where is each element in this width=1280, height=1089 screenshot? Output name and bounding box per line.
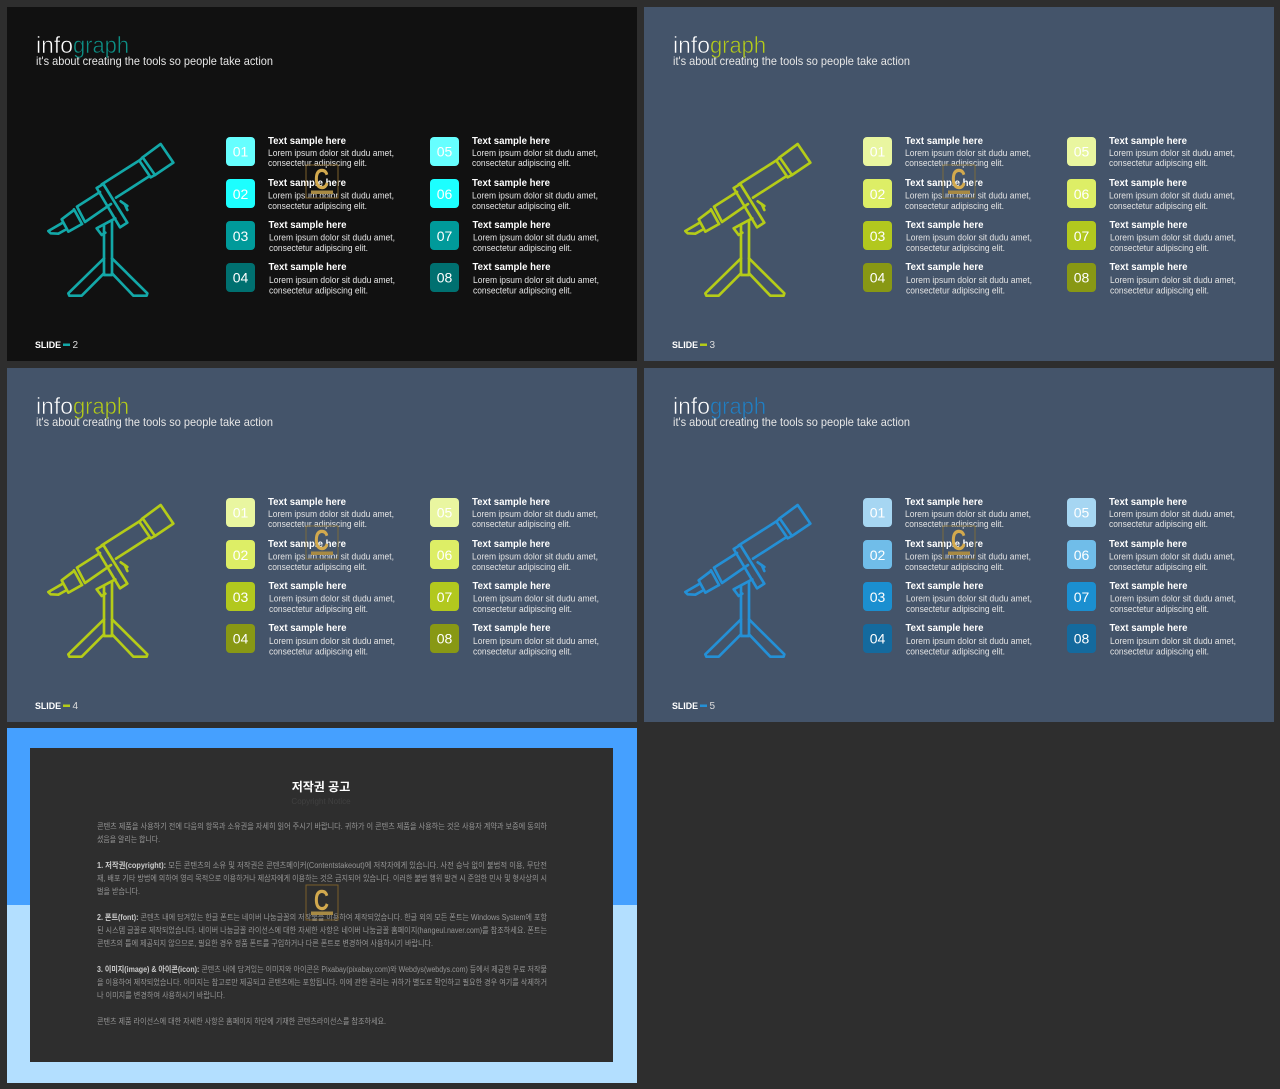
font paragraph: 된 시스템 글꼴로 제작되었습니다. 네이버 나눔글꼴 라이선스에 대한 자세한 사항은 네이버 나눔글꼴 홈페이지(hangeul.naver.com)를 참조하세요. 폰트는 xyxy=(97,925,547,935)
panel: slide 3 xyxy=(644,7,1274,361)
watermark logo: C xyxy=(314,164,329,196)
item 03: consectetur adipiscing elit. xyxy=(269,243,368,253)
item 03: 03 xyxy=(870,589,885,605)
item 01: Text sample here xyxy=(905,135,983,147)
item 03: Text sample here xyxy=(906,580,984,592)
item 07: 07 xyxy=(1074,228,1089,244)
item 03: Lorem ipsum dolor sit dudu amet, xyxy=(269,232,395,242)
item 04: consectetur adipiscing elit. xyxy=(906,646,1005,656)
slide number: SLIDE xyxy=(672,340,698,351)
item 06 xyxy=(1067,538,1235,572)
icon: telescope xyxy=(685,505,810,657)
item 03: Text sample here xyxy=(906,219,984,231)
item 05: 05 xyxy=(1074,504,1089,520)
item 02: Lorem ipsum dolor sit dudu amet, xyxy=(268,552,394,562)
item 07: consectetur adipiscing elit. xyxy=(1110,243,1209,253)
item 08: Lorem ipsum dolor sit dudu amet, xyxy=(1110,275,1236,285)
item 08 xyxy=(430,261,599,296)
item 07 xyxy=(1067,580,1236,614)
item 08: 08 xyxy=(437,270,452,286)
panel: copyright notice xyxy=(7,728,637,1083)
item 04: Lorem ipsum dolor sit dudu amet, xyxy=(906,275,1032,285)
item 01: 01 xyxy=(233,144,248,160)
item 04 xyxy=(863,261,1032,296)
item 04 xyxy=(863,622,1032,656)
item 03: 03 xyxy=(233,228,248,244)
item 07: 07 xyxy=(1074,589,1089,605)
item 05: Lorem ipsum dolor sit dudu amet, xyxy=(1109,509,1235,519)
item 06: Text sample here xyxy=(1109,177,1187,189)
item 04: consectetur adipiscing elit. xyxy=(906,286,1005,296)
item 07: Lorem ipsum dolor sit dudu amet, xyxy=(473,594,599,604)
item 04 xyxy=(226,261,395,296)
item 05 xyxy=(430,496,598,529)
watermark logo xyxy=(943,525,975,559)
slide number: 5 xyxy=(710,701,716,712)
item 08: Lorem ipsum dolor sit dudu amet, xyxy=(473,636,599,646)
item 03: Text sample here xyxy=(268,580,347,592)
slide number xyxy=(672,701,716,712)
item 06: Lorem ipsum dolor sit dudu amet, xyxy=(472,190,598,200)
item 03: Lorem ipsum dolor sit dudu amet, xyxy=(269,594,395,604)
heading xyxy=(36,32,129,58)
item 01: 01 xyxy=(870,144,885,160)
watermark logo: C xyxy=(951,164,966,196)
item 03 xyxy=(863,219,1032,253)
item 02: 02 xyxy=(233,186,248,202)
item 07: consectetur adipiscing elit. xyxy=(473,243,572,253)
item 02: Lorem ipsum dolor sit dudu amet, xyxy=(268,190,394,200)
item 05: Text sample here xyxy=(472,135,550,147)
item 08: 08 xyxy=(1074,630,1089,646)
copyright paragraph: 재, 배포 기타 방법에 의하여 영리 목적으로 이용하거나 제삼자에게 이용하는 것은 금지되어 있습니다. 이러한 불법 행위 발견 시 준엄한 민사 및 형사상의 시 xyxy=(97,873,547,883)
item 04: Lorem ipsum dolor sit dudu amet, xyxy=(269,275,395,285)
heading xyxy=(36,393,129,419)
intro paragraph xyxy=(97,821,548,844)
heading: info xyxy=(673,393,710,419)
item 06: Lorem ipsum dolor sit dudu amet, xyxy=(1109,190,1235,200)
item 04: 04 xyxy=(233,630,248,646)
item 01: consectetur adipiscing elit. xyxy=(268,158,367,168)
item 01: Lorem ipsum dolor sit dudu amet, xyxy=(268,148,394,158)
heading: graph xyxy=(73,393,129,419)
watermark logo xyxy=(306,525,338,559)
item 08 xyxy=(1067,261,1236,296)
item 04: Lorem ipsum dolor sit dudu amet, xyxy=(906,636,1032,646)
item 03: consectetur adipiscing elit. xyxy=(906,243,1005,253)
item 07 xyxy=(430,219,599,253)
item 01: consectetur adipiscing elit. xyxy=(905,158,1004,168)
item 02 xyxy=(226,538,394,572)
item 03: Lorem ipsum dolor sit dudu amet, xyxy=(906,232,1032,242)
item 06: Lorem ipsum dolor sit dudu amet, xyxy=(472,552,598,562)
heading: info xyxy=(36,393,73,419)
item 06: Text sample here xyxy=(472,538,550,550)
item 03 xyxy=(863,580,1032,614)
item 05 xyxy=(430,135,598,168)
item 05: Text sample here xyxy=(1109,135,1187,147)
item 01: Text sample here xyxy=(905,496,983,508)
notice title: 저작권 공고 xyxy=(292,779,350,794)
item 01: Lorem ipsum dolor sit dudu amet, xyxy=(268,509,394,519)
heading xyxy=(673,32,766,58)
image and icon paragraph: 을 이용하여 제작되었습니다. 이미지는 참고로만 제공되고 콘텐츠에는 포함됩니다. 이에 관한 권리는 귀하가 별도로 확인하고 필요한 경우 여기를 삭제하거 xyxy=(97,977,547,987)
item 02 xyxy=(226,177,394,211)
item 03: Lorem ipsum dolor sit dudu amet, xyxy=(906,594,1032,604)
item 04: Text sample here xyxy=(268,622,347,634)
heading: info xyxy=(673,32,710,58)
item 05: Lorem ipsum dolor sit dudu amet, xyxy=(1109,148,1235,158)
item 07: Text sample here xyxy=(1110,580,1188,592)
item 01: consectetur adipiscing elit. xyxy=(268,519,367,529)
item 08 xyxy=(1067,622,1236,656)
slide number: SLIDE xyxy=(672,701,698,712)
item 07 xyxy=(430,580,599,614)
item 04: consectetur adipiscing elit. xyxy=(269,646,368,656)
item 06: 06 xyxy=(437,547,452,563)
item 04: Text sample here xyxy=(906,261,984,273)
item 08: Lorem ipsum dolor sit dudu amet, xyxy=(473,275,599,285)
item 06: consectetur adipiscing elit. xyxy=(472,562,571,572)
item 02 xyxy=(863,177,1031,211)
item 04: 04 xyxy=(870,270,885,286)
item 02: consectetur adipiscing elit. xyxy=(905,201,1004,211)
item 01 xyxy=(226,496,394,529)
slide number: SLIDE xyxy=(35,701,61,712)
item 01: Text sample here xyxy=(268,135,346,147)
item 07: consectetur adipiscing elit. xyxy=(1110,604,1209,614)
item 08 xyxy=(430,622,599,656)
icon: telescope xyxy=(685,144,810,296)
item 03: consectetur adipiscing elit. xyxy=(269,604,368,614)
watermark logo: C xyxy=(314,525,329,557)
item 05: consectetur adipiscing elit. xyxy=(472,158,571,168)
item 06: 06 xyxy=(1074,547,1089,563)
item 02 xyxy=(863,538,1031,572)
item 04: Lorem ipsum dolor sit dudu amet, xyxy=(269,636,395,646)
item 05: 05 xyxy=(437,504,452,520)
slide number: 4 xyxy=(72,701,78,712)
item 07: 07 xyxy=(437,228,452,244)
item 06: Text sample here xyxy=(472,177,550,189)
item 06: 06 xyxy=(1074,186,1089,202)
panel: slide 2 xyxy=(7,7,637,361)
item 01: Lorem ipsum dolor sit dudu amet, xyxy=(905,148,1031,158)
item 06: 06 xyxy=(437,186,452,202)
item 06: consectetur adipiscing elit. xyxy=(472,201,571,211)
image and icon paragraph: 3. 이미지(image) & 아이콘(icon): 콘텐츠 내에 담겨있는 이미지와 아이콘은 Pixabay(pixabay.com)와 Webdys(webdys.com) 등에서 제공한 무료 저작물 xyxy=(97,964,547,974)
item 08: Lorem ipsum dolor sit dudu amet, xyxy=(1110,636,1236,646)
item 02: Lorem ipsum dolor sit dudu amet, xyxy=(905,190,1031,200)
item 04 xyxy=(226,622,395,656)
item 02: 02 xyxy=(870,186,885,202)
item 06 xyxy=(1067,177,1235,211)
item 03 xyxy=(226,219,395,253)
font paragraph: 콘텐츠의 틀에 제공되지 않으므로, 필요한 경우 정품 폰트를 구입하거나 다른 폰트로 변경하여 사용하시기 바랍니다. xyxy=(97,938,433,948)
item 02: Text sample here xyxy=(268,538,346,550)
item 02: Text sample here xyxy=(268,177,346,189)
item 06 xyxy=(430,177,598,211)
font paragraph: 2. 폰트(font): 콘텐츠 내에 담겨있는 한글 폰트는 네이버 나눔글꼴의 저작물을 이용하여 제작되었습니다. 한글 외의 모든 폰트는 Windows System에 포함 xyxy=(97,912,548,922)
item 01: consectetur adipiscing elit. xyxy=(905,519,1004,529)
subtitle: it's about creating the tools so people take action xyxy=(673,415,910,429)
item 02: 02 xyxy=(233,547,248,563)
item 02: consectetur adipiscing elit. xyxy=(905,562,1004,572)
image and icon paragraph xyxy=(97,964,547,1000)
panel: slide 5 xyxy=(644,368,1274,722)
item 02: consectetur adipiscing elit. xyxy=(268,562,367,572)
item 06: Text sample here xyxy=(1109,538,1187,550)
slide number xyxy=(35,340,78,351)
subtitle: it's about creating the tools so people take action xyxy=(673,54,910,68)
item 03: 03 xyxy=(870,228,885,244)
item 05: consectetur adipiscing elit. xyxy=(472,519,571,529)
subtitle: it's about creating the tools so people take action xyxy=(36,54,273,68)
watermark logo xyxy=(306,885,338,920)
icon: telescope xyxy=(48,144,173,296)
item 06 xyxy=(430,538,598,572)
item 07: Text sample here xyxy=(1110,219,1188,231)
item 03: Text sample here xyxy=(268,219,347,231)
item 07: Text sample here xyxy=(472,580,551,592)
item 01 xyxy=(863,496,1031,529)
slide number: SLIDE xyxy=(35,340,61,351)
item 08: consectetur adipiscing elit. xyxy=(473,286,572,296)
item 08: Text sample here xyxy=(1110,622,1188,634)
item 03: 03 xyxy=(233,589,248,605)
item 01: 01 xyxy=(233,504,248,520)
item 07: 07 xyxy=(437,589,452,605)
item 05: Lorem ipsum dolor sit dudu amet, xyxy=(472,148,598,158)
watermark logo: C xyxy=(951,525,966,557)
item 05: Lorem ipsum dolor sit dudu amet, xyxy=(472,509,598,519)
item 08: 08 xyxy=(1074,270,1089,286)
slide number: 3 xyxy=(710,340,716,351)
item 05 xyxy=(1067,496,1235,529)
item 03: consectetur adipiscing elit. xyxy=(906,604,1005,614)
item 04: Text sample here xyxy=(268,261,347,273)
item 04: 04 xyxy=(870,630,885,646)
image and icon paragraph: 나 이미지를 변경하여 사용하시기 바랍니다. xyxy=(97,990,225,1000)
slide number xyxy=(672,340,716,351)
item 07: Lorem ipsum dolor sit dudu amet, xyxy=(1110,232,1236,242)
item 08: consectetur adipiscing elit. xyxy=(1110,286,1209,296)
watermark logo xyxy=(943,164,975,198)
slide number: 2 xyxy=(72,340,78,351)
watermark logo: C xyxy=(314,885,329,917)
heading: info xyxy=(36,32,73,58)
item 06: consectetur adipiscing elit. xyxy=(1109,562,1208,572)
item 05: 05 xyxy=(437,144,452,160)
item 02: Text sample here xyxy=(905,538,983,550)
notice subtitle: Copyright Notice xyxy=(291,797,351,806)
license paragraph: 콘텐츠 제품 라이선스에 대한 자세한 사항은 홈페이지 하단에 기재한 콘텐츠라이선스를 참조하세요. xyxy=(97,1016,386,1026)
item 04: Text sample here xyxy=(906,622,984,634)
item 07: Lorem ipsum dolor sit dudu amet, xyxy=(1110,594,1236,604)
item 02: Lorem ipsum dolor sit dudu amet, xyxy=(905,552,1031,562)
item 06: consectetur adipiscing elit. xyxy=(1109,201,1208,211)
intro paragraph: 콘텐츠 제품을 사용하기 전에 다음의 항목과 소유권을 자세히 읽어 주시기 바랍니다. 귀하가 이 콘텐츠 제품을 사용하는 것은 사용자 계약과 보증에 동의하 xyxy=(97,821,548,831)
item 05: consectetur adipiscing elit. xyxy=(1109,519,1208,529)
intro paragraph: 셨음을 알리는 합니다. xyxy=(97,834,160,844)
item 05 xyxy=(1067,135,1235,168)
heading: graph xyxy=(710,393,766,419)
subtitle: it's about creating the tools so people take action xyxy=(36,415,273,429)
item 08: Text sample here xyxy=(472,261,551,273)
font paragraph xyxy=(97,912,548,948)
copyright paragraph: 1. 저작권(copyright): 모든 콘텐츠의 소유 및 저작권은 콘텐츠메이커(Contentstakeout)에 저작자에게 있습니다. 사전 승낙 없이 불법적 이용, 무단전 xyxy=(97,860,547,870)
item 08: 08 xyxy=(437,630,452,646)
item 08: Text sample here xyxy=(472,622,551,634)
item 02: 02 xyxy=(870,547,885,563)
item 01: Text sample here xyxy=(268,496,346,508)
slide number xyxy=(35,701,78,712)
item 01 xyxy=(226,135,394,168)
item 05: Text sample here xyxy=(472,496,550,508)
watermark logo xyxy=(306,164,338,198)
copyright paragraph: 벌을 받습니다. xyxy=(97,886,140,896)
item 08: Text sample here xyxy=(1110,261,1188,273)
heading: graph xyxy=(73,32,129,58)
item 02: Text sample here xyxy=(905,177,983,189)
item 01 xyxy=(863,135,1031,168)
item 03 xyxy=(226,580,395,614)
item 02: consectetur adipiscing elit. xyxy=(268,201,367,211)
panel: slide 4 xyxy=(7,368,637,722)
item 06: Lorem ipsum dolor sit dudu amet, xyxy=(1109,552,1235,562)
item 07: Lorem ipsum dolor sit dudu amet, xyxy=(473,232,599,242)
item 08: consectetur adipiscing elit. xyxy=(473,646,572,656)
item 04: consectetur adipiscing elit. xyxy=(269,286,368,296)
item 05: 05 xyxy=(1074,144,1089,160)
item 07 xyxy=(1067,219,1236,253)
item 08: consectetur adipiscing elit. xyxy=(1110,646,1209,656)
item 01: Lorem ipsum dolor sit dudu amet, xyxy=(905,509,1031,519)
item 05: Text sample here xyxy=(1109,496,1187,508)
item 04: 04 xyxy=(233,270,248,286)
icon: telescope xyxy=(48,505,173,657)
copyright paragraph xyxy=(97,860,547,896)
item 01: 01 xyxy=(870,504,885,520)
heading: graph xyxy=(710,32,766,58)
item 07: Text sample here xyxy=(472,219,551,231)
item 07: consectetur adipiscing elit. xyxy=(473,604,572,614)
heading xyxy=(673,393,766,419)
item 05: consectetur adipiscing elit. xyxy=(1109,158,1208,168)
